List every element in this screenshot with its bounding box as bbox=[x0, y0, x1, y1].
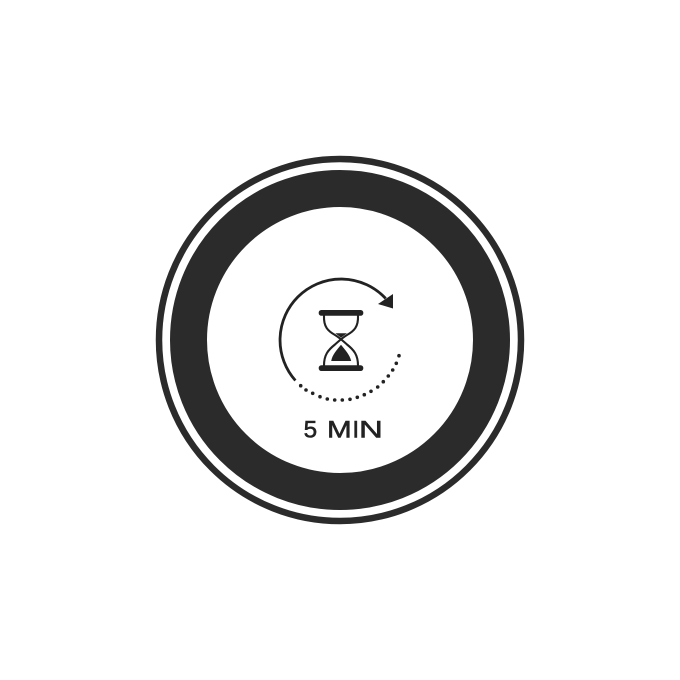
outer circular badge rings bbox=[159, 159, 521, 521]
solid arc arrow bbox=[280, 279, 393, 380]
label: 5 MIN bbox=[304, 416, 383, 443]
label: 5 MIN: I bbox=[352, 416, 359, 443]
label: 5 MIN: 5 bbox=[304, 416, 317, 443]
dotted remaining-time arc bbox=[299, 354, 401, 402]
label: 5 MIN: M bbox=[327, 416, 352, 443]
hourglass bbox=[319, 310, 363, 371]
label: 5 MIN: N bbox=[359, 416, 383, 443]
icon: hourglass with circular timer arrow bbox=[280, 279, 401, 402]
